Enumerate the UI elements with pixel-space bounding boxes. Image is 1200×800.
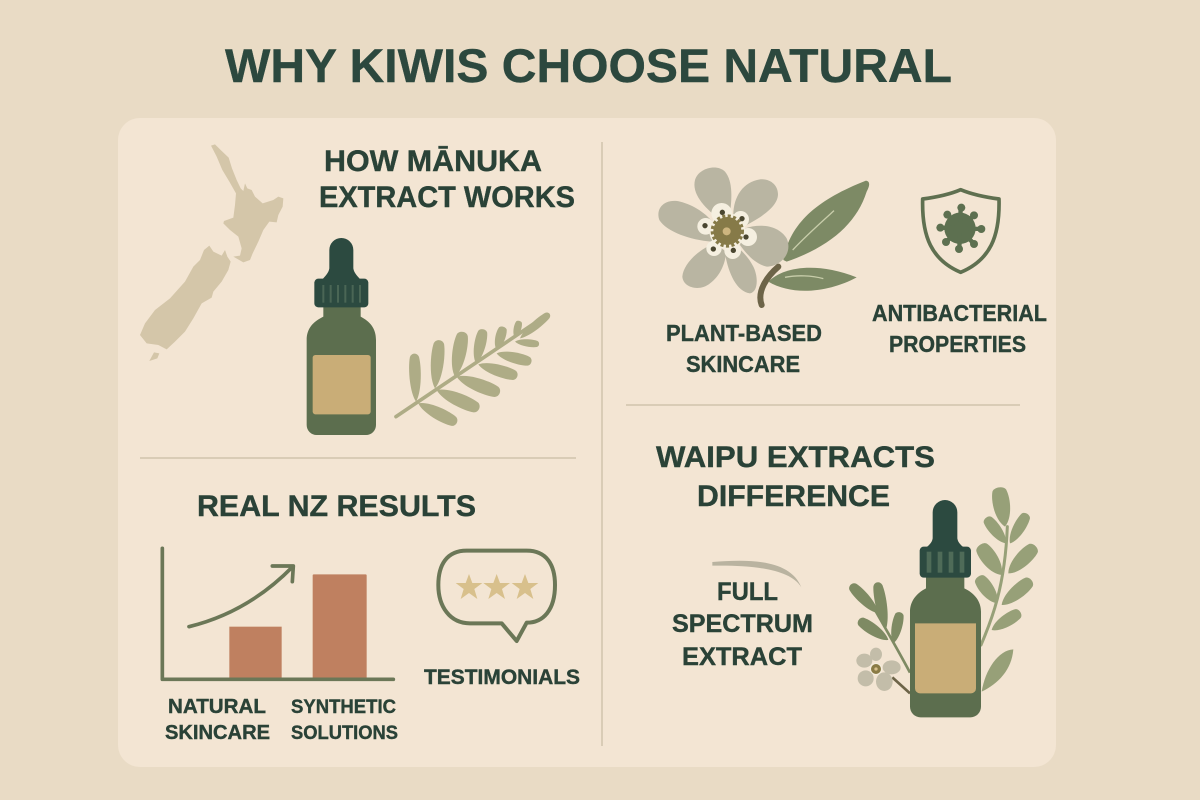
icon: antibacterial shield (923, 190, 999, 272)
label: synthetic solutions: SOLUTIONS (291, 723, 398, 744)
icon: dropper bottle with label (910, 500, 981, 717)
label: plant-based skincare (666, 320, 822, 377)
panel: how manuka extract works (140, 144, 575, 435)
label: plant-based skincare: PLANT-BASED (666, 320, 822, 346)
label: full spectrum extract: EXTRACT (682, 643, 802, 671)
label: full spectrum extract: FULL (717, 578, 778, 606)
heading: Waipu Extracts difference: WAIPU EXTRACTS (656, 441, 935, 474)
arrow: upward trend (189, 566, 293, 627)
label: synthetic solutions (291, 697, 398, 744)
heading: how manuka extract works: HOW MĀNUKA (324, 145, 542, 178)
label: synthetic solutions: SYNTHETIC (291, 697, 396, 718)
label: testimonials: TESTIMONIALS (424, 666, 580, 689)
title: WHY KIWIS CHOOSE NATURAL (225, 40, 952, 93)
icon: botanical sprigs and flower (847, 486, 1041, 693)
bar: synthetic solutions (313, 574, 367, 678)
label: full spectrum extract (672, 578, 813, 671)
label: antibacterial properties (872, 300, 1047, 357)
bar: natural skincare (229, 627, 282, 678)
icon: dropper bottle (307, 238, 376, 435)
panel: Waipu Extracts difference (656, 441, 1041, 717)
label: antibacterial properties: PROPERTIES (889, 331, 1026, 357)
heading: how manuka extract works (319, 145, 575, 214)
icon: speech bubble with stars (438, 551, 555, 641)
heading: how manuka extract works: EXTRACT WORKS (319, 181, 575, 214)
icon: manuka flower with leaves (658, 168, 869, 305)
heading: Waipu Extracts difference (656, 441, 935, 513)
label: natural skincare: SKINCARE (165, 722, 270, 744)
icon: manuka sprig (396, 310, 552, 429)
label: natural skincare (165, 696, 270, 744)
label: antibacterial properties: ANTIBACTERIAL (872, 300, 1047, 326)
label: full spectrum extract: SPECTRUM (672, 610, 813, 638)
panel: benefits (658, 168, 1047, 377)
heading: real NZ results: REAL NZ RESULTS (197, 490, 476, 523)
bar chart (162, 548, 393, 679)
label: plant-based skincare: SKINCARE (686, 351, 800, 377)
decorative swoosh above label (712, 561, 801, 587)
label: natural skincare: NATURAL (168, 696, 266, 718)
main card panel (118, 118, 1056, 767)
panel: real NZ results (162, 490, 580, 744)
heading: Waipu Extracts difference: DIFFERENCE (697, 480, 890, 513)
map of New Zealand (140, 144, 283, 361)
